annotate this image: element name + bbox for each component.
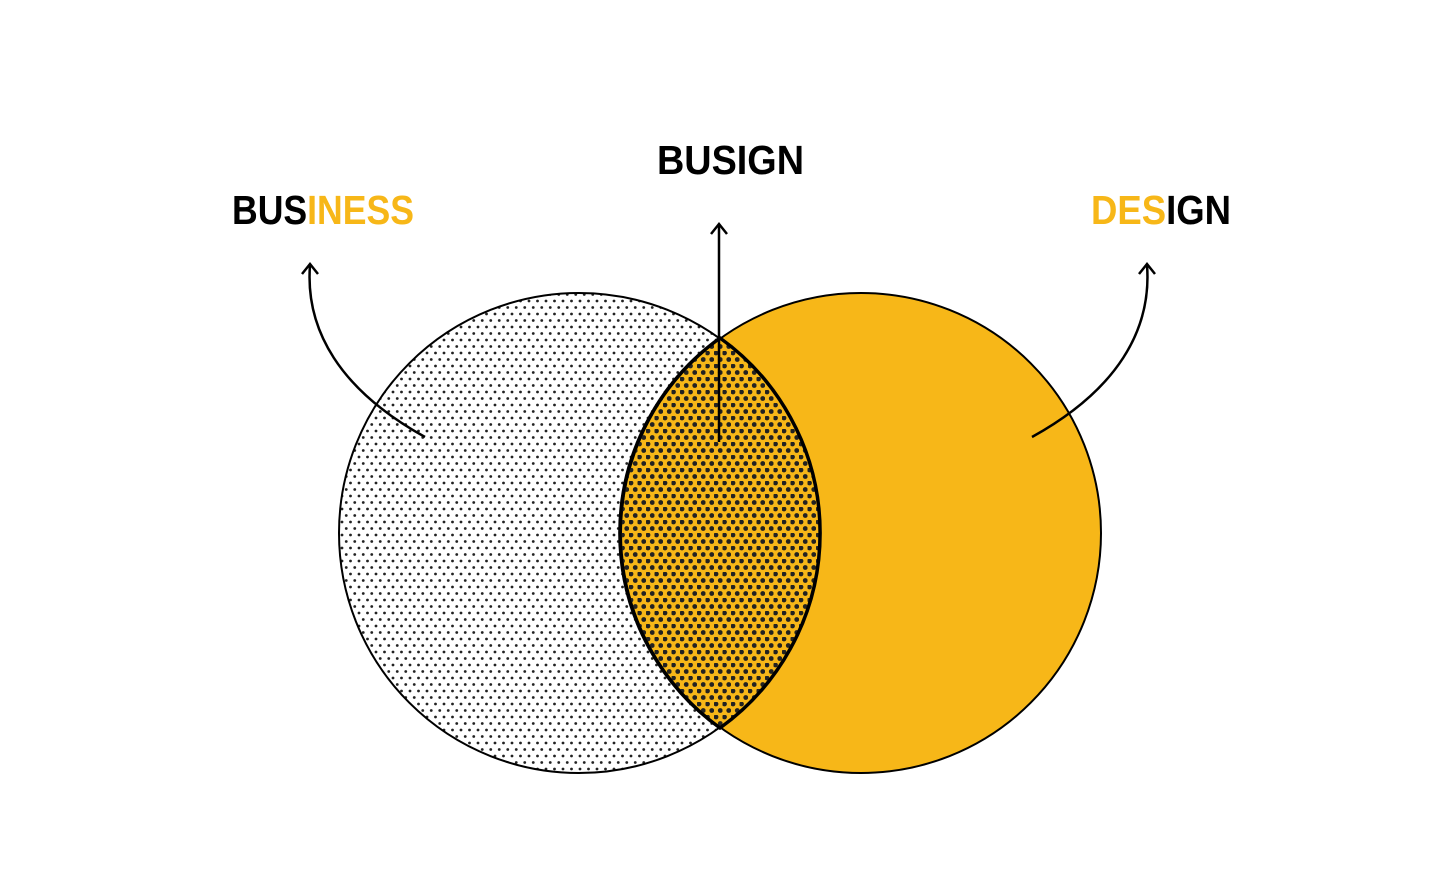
arrow: design — [1032, 264, 1155, 437]
label: design: DESIGN — [1091, 187, 1231, 233]
venn diagram — [339, 293, 1101, 773]
circle: business — [339, 293, 819, 773]
arrow: busign — [711, 224, 727, 442]
circle: design — [621, 293, 1101, 773]
label: busign: BUSIGN — [657, 137, 804, 183]
intersection: busign — [622, 342, 818, 726]
label: business: BUSINESS — [232, 187, 414, 233]
arrow: business — [302, 264, 425, 437]
lens outline — [620, 338, 820, 728]
